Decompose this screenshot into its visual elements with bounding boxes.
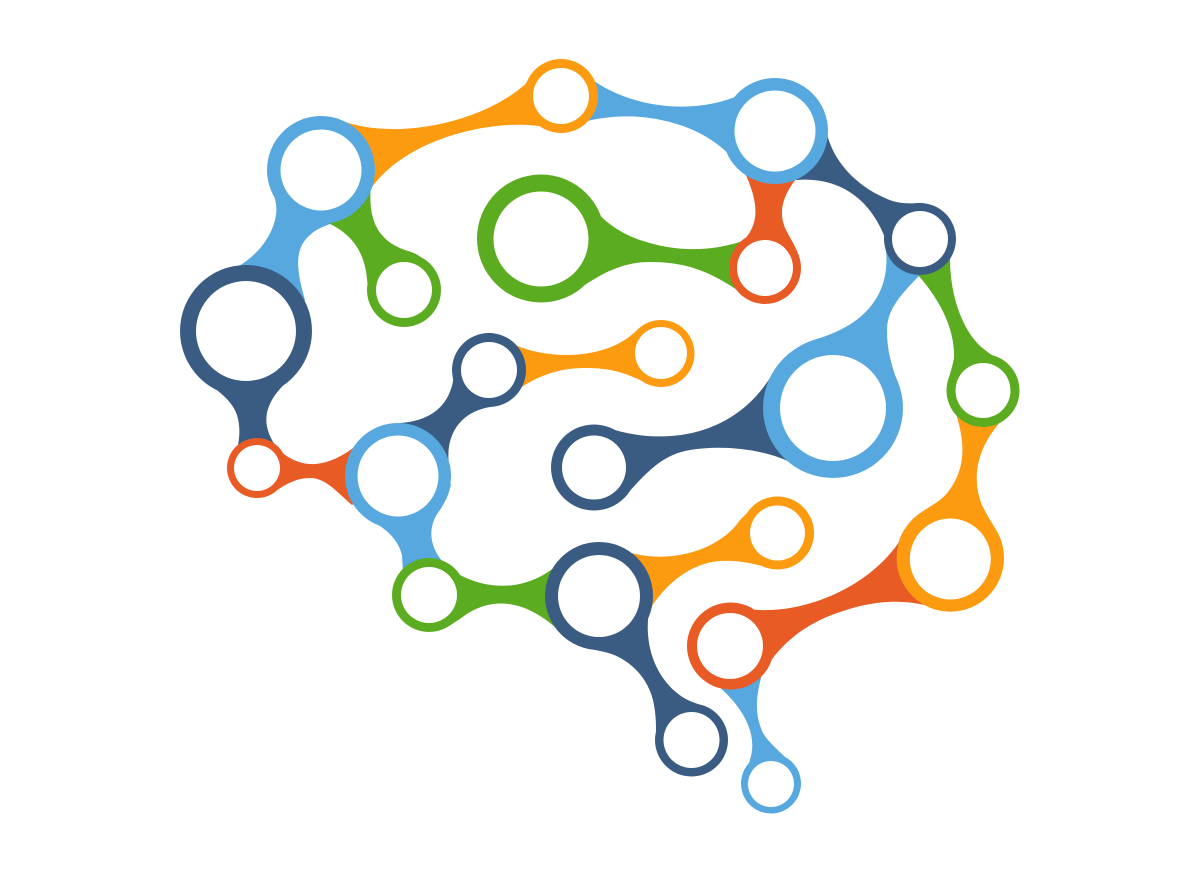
- connector: navy bottom centre to orange: [598, 507, 778, 609]
- node: red small left: [227, 438, 287, 498]
- connector: red small to blue lower left: [257, 442, 398, 505]
- connector: green right to orange large: [898, 391, 1002, 558]
- node: navy bottom: [655, 704, 728, 776]
- node: navy right: [884, 203, 956, 275]
- connector: blue upper left to navy left: [232, 170, 335, 331]
- node: blue bottom: [741, 754, 801, 814]
- connector: red to blue bottom: [718, 646, 795, 784]
- node: blue upper left: [267, 116, 375, 224]
- connector: green lower to navy bottom centre: [429, 560, 598, 628]
- node: green lower: [392, 558, 466, 632]
- connector: navy right to green right: [917, 239, 1012, 391]
- node: blue large: [763, 338, 903, 478]
- node: navy lower centre: [551, 424, 637, 510]
- connector: orange top to blue upper left: [321, 70, 561, 187]
- connector: blue top right to navy right: [775, 130, 920, 262]
- connector: navy centre to blue lower left: [398, 361, 517, 476]
- ring nodes: [180, 59, 1020, 814]
- node: blue top right: [722, 78, 828, 184]
- connector: navy lower centre to blue large: [594, 378, 833, 497]
- node: navy bottom centre: [545, 542, 653, 650]
- connector: navy centre to orange centre: [489, 332, 661, 388]
- node: orange lower: [741, 496, 814, 570]
- node: green centre: [477, 174, 605, 302]
- connector: blue top right to red: [733, 131, 799, 268]
- node: red upper right: [729, 232, 801, 304]
- connector: orange top to blue top right: [561, 78, 775, 173]
- node: navy left large: [180, 265, 312, 397]
- node: orange top: [524, 59, 598, 133]
- connector: navy right to blue large: [763, 239, 921, 410]
- node: blue lower left: [345, 423, 451, 529]
- node: orange large right: [897, 504, 1004, 612]
- connector: navy bottom centre to navy bottom: [556, 596, 718, 740]
- connectors between nodes: [197, 70, 1012, 784]
- connector: blue lower left to green lower: [358, 476, 451, 595]
- node: green right: [946, 354, 1020, 427]
- connector: navy left to red small: [197, 331, 308, 468]
- connector: green centre to red: [541, 186, 765, 290]
- connector: orange large to red: [729, 542, 950, 675]
- node: green small: [367, 253, 441, 327]
- node: orange centre: [628, 320, 694, 387]
- node: red lower: [687, 602, 774, 690]
- node: navy centre: [452, 333, 526, 407]
- connector: blue upper left to green small: [321, 170, 426, 293]
